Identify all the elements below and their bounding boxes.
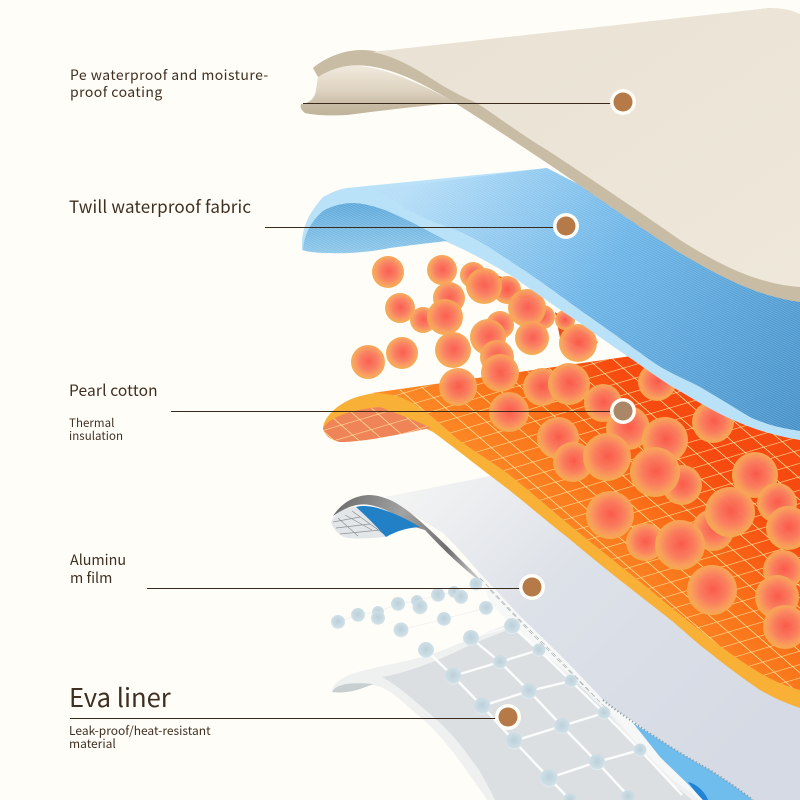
liner white rim: [332, 623, 700, 800]
marker: aluminum film: [519, 574, 545, 600]
liner underside: [332, 683, 373, 693]
marker: PE coating: [610, 89, 636, 115]
label: thermal insulation: Thermal: [69, 415, 114, 431]
aluminum film silver underside: [331, 507, 386, 539]
orange insulation beads: [351, 255, 800, 649]
label: leak-proof note: [69, 722, 211, 752]
beige top surface: [372, 8, 800, 287]
marker: twill fabric: [553, 213, 579, 239]
blue light rim: [302, 168, 800, 440]
label: leak-proof note: material: [69, 735, 116, 752]
mesh grid lines: [378, 352, 800, 690]
beige dark thick edge: [313, 8, 800, 302]
label: leak-proof note: Leak-proof/heat-resistant: [69, 722, 211, 739]
beige underside: [301, 66, 455, 115]
label: thermal insulation: [69, 415, 123, 444]
layer: aluminum film sheet: [331, 470, 800, 800]
aluminum film blue fold: [356, 506, 420, 537]
label: thermal insulation: insulation: [69, 428, 123, 444]
layer: Eva liner sheet: [331, 578, 700, 800]
layer: orange thermal mesh: [323, 352, 800, 708]
layer: beige PE coating: [301, 8, 800, 302]
white edge strip: [477, 570, 753, 800]
label: twill fabric: Twill waterproof fabric: [69, 193, 251, 218]
mesh underside: [323, 407, 431, 442]
leader lines: [70, 104, 612, 718]
liner grey surface: [382, 628, 692, 800]
label: PE coating: [70, 65, 269, 102]
label: aluminum film: [70, 549, 126, 588]
layer: blue twill fabric: [302, 168, 800, 440]
pale connector balls: [331, 578, 646, 800]
label: aluminum film: Aluminu: [70, 549, 126, 570]
mesh surface: [372, 352, 800, 690]
label: aluminum film: m film: [70, 567, 112, 588]
blue ribbon: [633, 723, 753, 800]
mesh fragments visible between upper beads: [488, 272, 598, 352]
label: PE coating: Pe waterproof and moisture-: [70, 65, 269, 85]
blue underside: [303, 203, 447, 253]
aluminum film surface: [385, 470, 800, 800]
label: Eva liner: Eva liner: [69, 678, 171, 715]
blue top surface: [373, 168, 800, 431]
label: pearl cotton: Pearl cotton: [69, 379, 158, 401]
aluminum film folded metal edge: [333, 495, 492, 590]
mesh amber rim: [323, 352, 800, 708]
label: PE coating: proof coating: [70, 82, 163, 102]
marker: pearl cotton: [610, 398, 636, 424]
liner grid: [338, 584, 682, 800]
marker: Eva liner: [495, 704, 521, 730]
